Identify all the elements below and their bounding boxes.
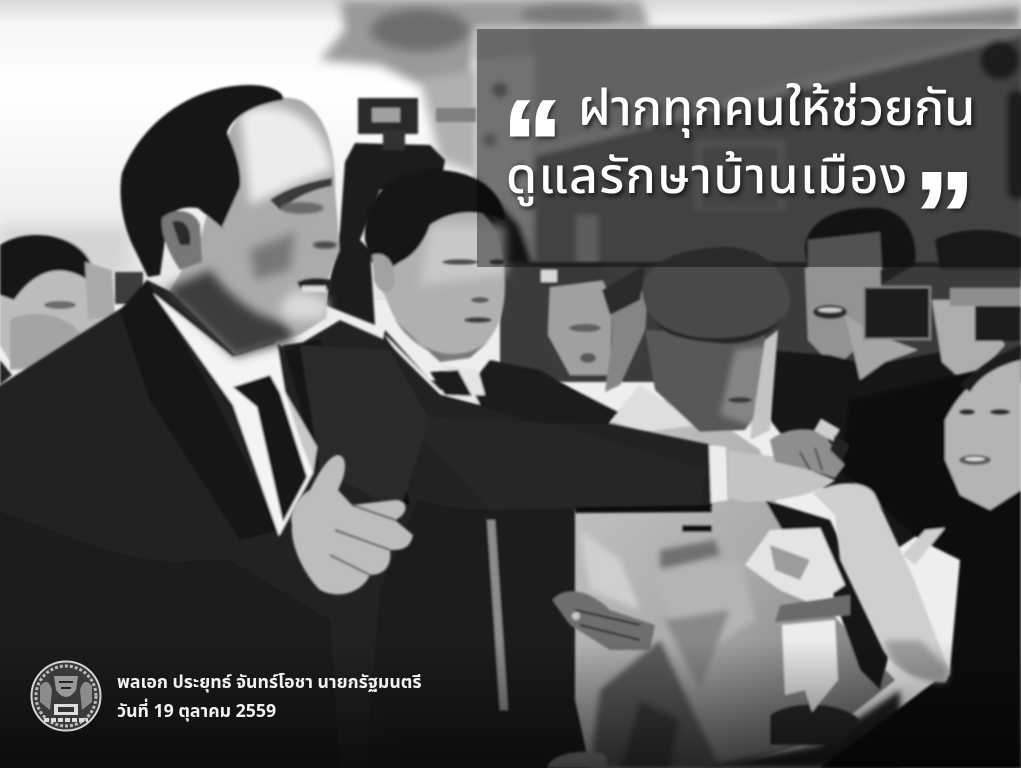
background camera operator: [325, 98, 476, 325]
ear: [162, 211, 202, 270]
prime minister in dark suit: [0, 85, 728, 768]
shirt: [153, 293, 317, 536]
quote line 2: ดูแลรักษาบ้านเมือง: [506, 140, 909, 216]
shirt cuff: [709, 445, 728, 503]
attribution name: พลเอก ประยุทธ์ จันทร์โอชา นายกรัฐมนตรี: [117, 669, 422, 696]
dark gap behind tissue: [765, 500, 890, 690]
arm: [813, 483, 950, 682]
second man in dark suit: [340, 170, 620, 768]
white tissue bundle: [745, 528, 845, 605]
delivery truck behind the crowd: [474, 26, 1021, 330]
background sky and trees: [0, 0, 1021, 300]
tie: [233, 375, 307, 522]
hair: [121, 85, 283, 277]
soldier in beret and camouflage: [575, 247, 900, 768]
suit: [340, 330, 620, 768]
man photographing: [768, 265, 1021, 560]
jacket and outstretched arm: [0, 280, 712, 768]
woman at right: [813, 345, 1021, 768]
soldier's hand at the left of uniform: [547, 591, 655, 768]
head of man behind camera, inside banner: [805, 208, 915, 285]
uniform: [575, 395, 895, 768]
quote line 1: ฝากทุกคนให้ช่วยกัน: [578, 72, 975, 148]
background crowd: [0, 208, 1021, 560]
opening quotation mark: “: [502, 75, 559, 211]
hair: [365, 170, 505, 270]
clasped hands and wristwatch: [728, 418, 850, 502]
footer: seal and attribution: [30, 660, 422, 732]
lower vignette: [0, 640, 1021, 768]
officer in cap: [530, 262, 648, 392]
icon: government seal: [30, 660, 102, 732]
translucent dark banner: [477, 29, 1021, 267]
face: [645, 330, 765, 432]
hand on chest: [291, 455, 413, 594]
beret: [642, 247, 790, 343]
dark clothing: [820, 360, 1021, 768]
lapels: [120, 280, 280, 540]
left background man: [0, 235, 143, 385]
face: [372, 211, 505, 358]
face: [170, 98, 340, 355]
closing quotation mark: ”: [914, 147, 971, 283]
eyes, nose and mouth: [270, 178, 332, 210]
attribution date: วันที่ 19 ตุลาคม 2559: [117, 698, 276, 725]
face: [945, 358, 1021, 510]
quote: [502, 72, 975, 283]
dark base of the suits: [0, 480, 590, 768]
